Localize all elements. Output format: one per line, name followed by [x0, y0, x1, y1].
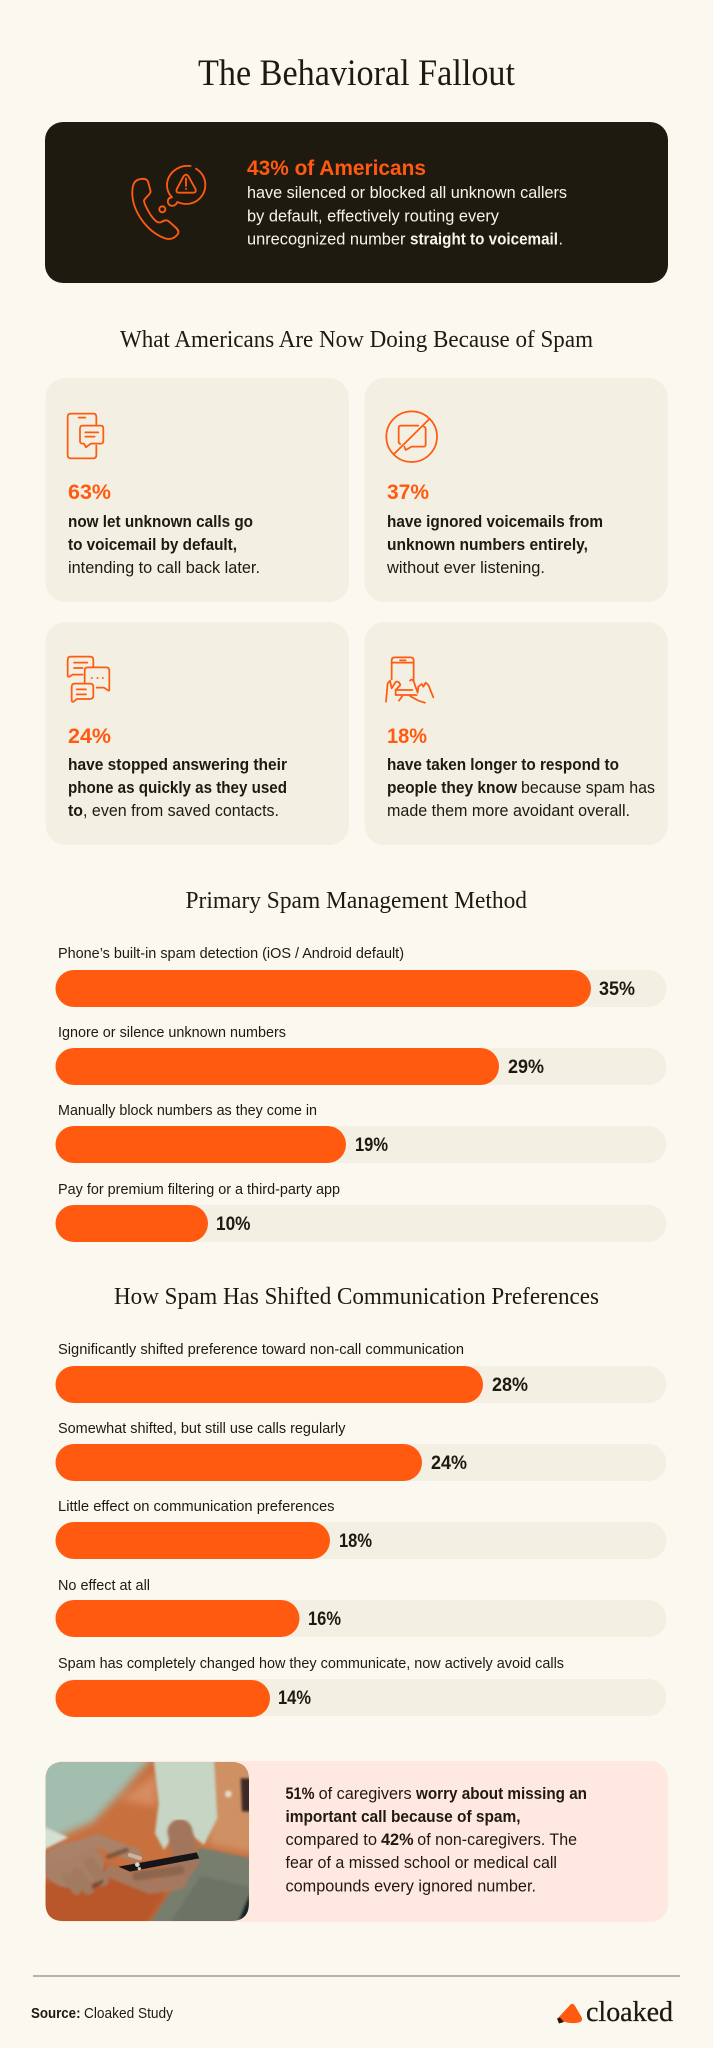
bar row: completely changed [56, 1655, 666, 1717]
source [31, 2005, 173, 2022]
description [68, 513, 260, 577]
bar row: ignore or silence [56, 1024, 666, 1085]
logo: cloaked: cloaked [586, 1996, 673, 2028]
heading: communication preferences: How Spam Has Shifted Communication Preferences [114, 1284, 599, 1310]
bar row: manually block: Manually block numbers as they come in [58, 1102, 317, 1119]
source: Source: [31, 2005, 80, 2022]
callout text: by default, effectively routing every [247, 208, 500, 226]
callout text [247, 184, 567, 248]
bar row: phone built-in detection: Phone’s built-in spam detection (iOS / Android default) [58, 945, 404, 962]
icon: phone with message [68, 414, 103, 458]
stat: 24% [68, 724, 111, 748]
description: without ever listening. [386, 559, 545, 577]
description: to [68, 802, 83, 820]
bar row: little effect: 18% [339, 1531, 372, 1552]
icon: chat bubbles [68, 657, 109, 702]
title: The Behavioral Fallout [198, 53, 516, 94]
bar chart: communication preferences [56, 1341, 666, 1717]
bar row: no effect [56, 1577, 666, 1637]
bar row: pay for premium [56, 1181, 666, 1242]
callout text: worry about missing an [415, 1785, 587, 1803]
source: Cloaked Study [84, 2005, 173, 2022]
photo: hands holding a smartphone [46, 1762, 249, 1921]
bar row: somewhat shifted: Somewhat shifted, but still use calls regularly [58, 1420, 346, 1437]
bar row: completely changed: 14% [278, 1688, 311, 1709]
callout text: important call because of spam, [286, 1808, 520, 1826]
callout text: fear of a missed school or medical call [286, 1854, 557, 1872]
heading: primary spam management method: Primary Spam Management Method [186, 888, 527, 914]
stat: 37% [387, 480, 429, 504]
description: have taken longer to respond to [387, 756, 619, 774]
callout text [286, 1785, 587, 1896]
icon: crossed-out message [386, 411, 437, 462]
bar row: significantly shifted: 28% [492, 1375, 528, 1396]
bar row: pay for premium: 10% [216, 1214, 251, 1235]
description: to voicemail by default, [68, 536, 237, 554]
bar chart: primary spam management method [56, 945, 666, 1242]
panel: 37% card [364, 378, 668, 602]
description [68, 756, 288, 820]
stat: 63% [68, 480, 111, 504]
description: intending to call back later. [68, 559, 260, 577]
description: have stopped answering their [68, 756, 288, 774]
bar row: little effect: Little effect on communication preferences [58, 1498, 334, 1515]
bar row: ignore or silence: 29% [508, 1057, 544, 1078]
bar row: significantly shifted: Significantly shifted preference toward non-call communication [58, 1341, 464, 1358]
callout text: compounds every ignored number. [286, 1878, 536, 1896]
bar row: pay for premium: Pay for premium filtering or a third-party app [58, 1181, 340, 1198]
heading: what Americans are doing: What Americans Are Now Doing Because of Spam [120, 327, 593, 353]
callout text: 51% [286, 1785, 315, 1803]
panel: 63% card [46, 378, 349, 602]
description [386, 513, 603, 577]
description: unknown numbers entirely, [387, 536, 588, 554]
callout text: straight to voicemail [410, 230, 558, 248]
bar row: completely changed: Spam has completely changed how they communicate, now actively avoid calls [58, 1655, 564, 1672]
panel: 24% card [46, 622, 349, 845]
bar row: ignore or silence: Ignore or silence unknown numbers [58, 1024, 286, 1041]
description: because spam has [521, 779, 655, 797]
icon: hands holding phone [386, 657, 433, 703]
callout text: 42% [381, 1831, 414, 1849]
bar row: significantly shifted [56, 1341, 666, 1403]
bar row: manually block [56, 1102, 666, 1163]
bar row: no effect: No effect at all [58, 1577, 150, 1594]
description: phone as quickly as they used [68, 779, 287, 797]
panel: caregivers callout [33, 1753, 668, 1927]
description [387, 756, 655, 820]
stat: 18% [387, 724, 427, 748]
icon: phone with warning bubble [132, 166, 205, 239]
bar row: phone built-in detection [56, 945, 666, 1007]
callout headline: 43% of Americans [247, 156, 426, 180]
bar row: manually block: 19% [355, 1135, 388, 1156]
bar row: somewhat shifted: 24% [431, 1453, 467, 1474]
callout text: have silenced or blocked all unknown callers [247, 184, 567, 202]
description: , even from saved contacts. [83, 802, 279, 820]
description: have ignored voicemails from [387, 513, 603, 531]
bar row: phone built-in detection: 35% [599, 979, 635, 1000]
description: now let unknown calls go [68, 513, 253, 531]
panel: 43% of Americans callout [45, 122, 668, 283]
bar row: little effect [56, 1498, 666, 1559]
description: made them more avoidant overall. [387, 802, 630, 820]
panel: 18% card [364, 622, 668, 845]
callout text: of caregivers [319, 1785, 412, 1803]
callout text: of non-caregivers. The [417, 1831, 577, 1849]
bar row: no effect: 16% [308, 1609, 341, 1630]
callout text: unrecognized number [247, 230, 406, 248]
bar row: somewhat shifted [56, 1420, 666, 1481]
description: people they know [387, 779, 517, 797]
callout text: compared to [286, 1831, 377, 1849]
callout text: . [558, 230, 563, 248]
